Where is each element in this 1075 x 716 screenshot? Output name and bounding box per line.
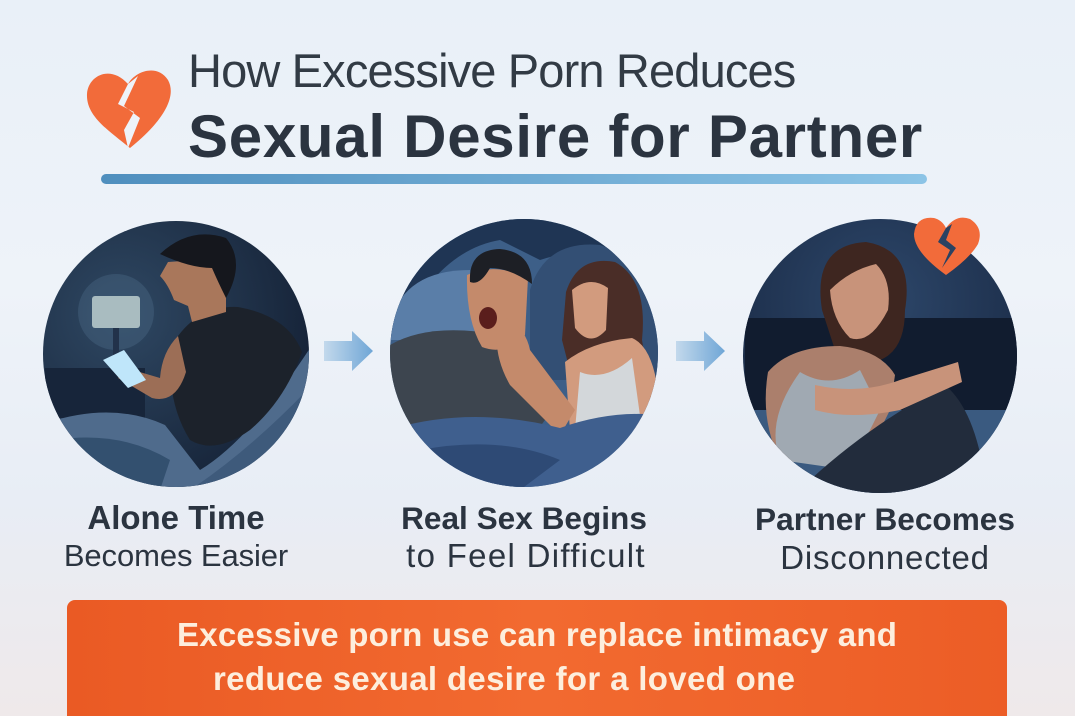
title underline [101,174,927,184]
arrow 1 [324,331,373,371]
icon: broken heart [87,70,171,148]
callout text line 2: reduce sexual desire for a loved one [213,660,795,697]
title line 1: How Excessive Porn Reduces [188,44,795,97]
man's arm and phone [118,336,186,399]
man's head [160,258,226,322]
caption 2 title: Real Sex Begins [401,500,647,536]
callout banner [67,600,1007,716]
arrow 2 [676,331,725,371]
caption 3 subtitle: Disconnected [780,539,990,576]
lamp [78,274,154,355]
blanket [410,414,644,487]
hair [820,242,907,360]
caption 2 subtitle: to Feel Difficult [406,537,646,574]
man [390,249,575,440]
legs [814,388,980,493]
title line 2: Sexual Desire for Partner [188,103,923,170]
torso [766,346,895,470]
callout text line 1: Excessive porn use can replace intimacy and [177,616,897,653]
woman [562,261,660,430]
circle 1: man alone with phone [40,220,312,490]
circle 3: sad woman [740,216,1020,496]
bed and blanket [60,350,309,487]
caption 1 subtitle: Becomes Easier [64,538,288,573]
face [830,264,889,339]
man's torso [170,307,302,446]
circle 2: yawning man and woman in bed [388,218,660,490]
caption 3 title: Partner Becomes [755,501,1015,537]
icon: small broken heart [914,218,980,275]
arms [815,362,962,415]
caption 1 title: Alone Time [87,499,265,536]
illustration layer [43,70,1017,493]
